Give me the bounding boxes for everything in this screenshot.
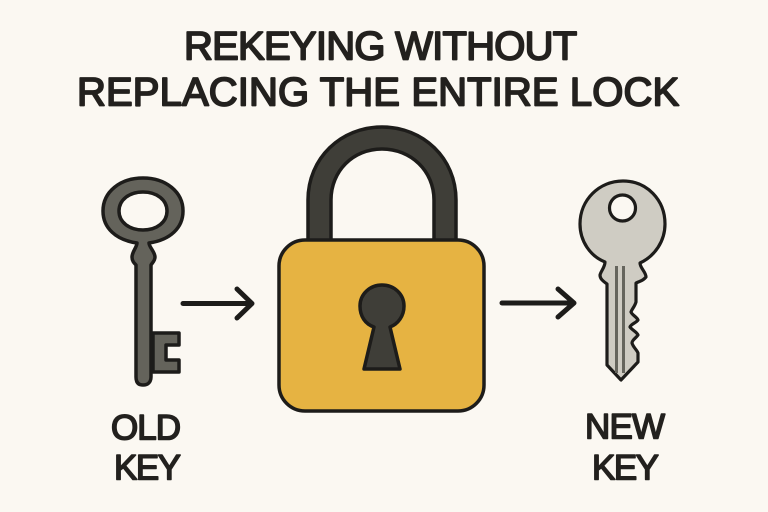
title: REPLACING THE ENTIRE LOCK: [77, 70, 680, 114]
icon: old key: [103, 178, 183, 385]
icon: new key: [580, 181, 665, 380]
label: old key: OLD: [111, 408, 181, 448]
padlock shackle: [308, 127, 456, 241]
label: old key: [111, 408, 181, 488]
padlock body: [279, 240, 484, 411]
label: new key: [585, 408, 665, 488]
label: old key: KEY: [114, 448, 181, 488]
arrow: lock to new key: [502, 289, 574, 317]
label: new key: NEW: [585, 408, 665, 446]
arrow: old key to lock: [183, 289, 252, 318]
icon: padlock: [279, 127, 484, 411]
title: [77, 24, 680, 114]
padlock keyhole: [360, 285, 404, 369]
label: new key: KEY: [592, 448, 659, 488]
title: REKEYING WITHOUT: [184, 24, 578, 68]
